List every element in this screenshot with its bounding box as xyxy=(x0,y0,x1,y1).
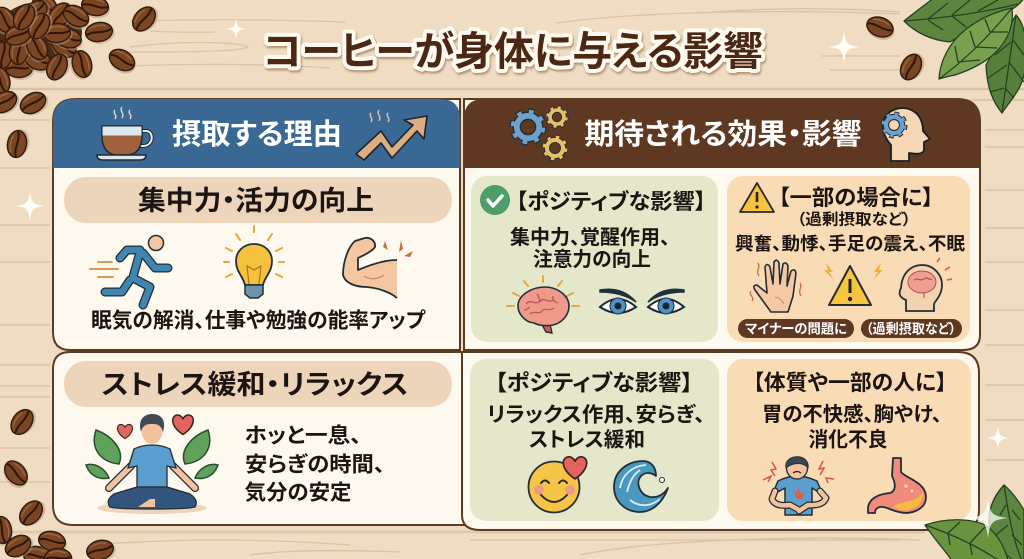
icon: warning small xyxy=(740,183,774,212)
heading pill: focus: 集中力・活力の向上 xyxy=(138,186,374,216)
icon: meditating person xyxy=(86,414,218,514)
text: positive focus xyxy=(510,226,670,271)
sparkles xyxy=(15,18,1010,450)
text: note: （過剰摂取など） xyxy=(797,210,911,228)
icon: gears xyxy=(514,108,566,158)
heading: constitution: 【体質や一部の人に】 xyxy=(753,371,947,395)
header: effects xyxy=(464,99,980,168)
text: stomach symptoms: 胃の不快感、胸やけ、 xyxy=(762,402,942,426)
icon: rising arrow xyxy=(356,110,427,160)
heading: effects: 期待される効果・影響 xyxy=(584,118,862,151)
icon: head with gear xyxy=(883,108,930,161)
heading pill: focus xyxy=(64,177,452,223)
leaves top-right xyxy=(904,0,1024,113)
text: positive focus: 集中力、覚醒作用、 xyxy=(510,226,670,249)
text: symptoms: 興奮、動悸、手足の震え、不眠 xyxy=(735,234,965,254)
icon: check mark xyxy=(480,185,510,215)
icon: brain xyxy=(507,276,579,333)
text: positive focus: 注意力の向上 xyxy=(533,248,651,271)
panel: effects top xyxy=(464,99,980,350)
icon: eyes xyxy=(600,289,684,314)
heading: caution: 【一部の場合に】 xyxy=(778,186,934,210)
leaves bottom-right xyxy=(925,485,1024,559)
body text: relax: ホッと一息、 xyxy=(244,424,362,448)
icon: head with brain xyxy=(900,258,952,311)
text: positive relax xyxy=(487,402,705,452)
coffee beans top-left xyxy=(0,0,163,159)
panel: effects bottom xyxy=(462,352,979,530)
heading pill: relax xyxy=(64,361,452,407)
tag: minor problem: マイナーの問題に xyxy=(745,322,847,336)
heading: reasons: 摂取する理由 xyxy=(172,118,342,151)
card: positive focus xyxy=(471,176,718,342)
sparkle over leaves xyxy=(968,498,1008,538)
tag: overdose: （過剰摂取など） xyxy=(866,322,956,336)
icon: runner xyxy=(90,236,168,305)
title: コーヒーが身体に与える影響 xyxy=(263,30,763,74)
icon: light bulb xyxy=(224,226,284,298)
coffee beans bottom-left xyxy=(0,404,118,559)
icon: flexed arm xyxy=(343,238,413,298)
text: stomach symptoms xyxy=(762,402,942,452)
icon: smiley with heart xyxy=(528,457,587,512)
heading pill: relax: ストレス緩和・リラックス xyxy=(102,370,408,400)
header: reasons xyxy=(53,99,460,168)
text: positive relax: ストレス緩和 xyxy=(529,428,645,452)
icon: person with stomach ache xyxy=(763,457,834,515)
body text: relax: 安らぎの時間、 xyxy=(245,452,385,476)
card: positive relax xyxy=(470,359,719,521)
heading: positive relax: 【ポジティブな影響】 xyxy=(495,370,693,396)
icon: warning large xyxy=(824,263,883,305)
body text: focus: 眠気の解消、仕事や勉強の能率アップ xyxy=(91,308,426,332)
panel: reasons top xyxy=(53,99,460,350)
body text: relax: 気分の安定 xyxy=(244,482,352,504)
icon: trembling hand xyxy=(750,260,801,312)
icon: wave xyxy=(614,461,668,512)
card: caution partial xyxy=(727,176,970,342)
heading: positive: 【ポジティブな影響】 xyxy=(516,189,706,214)
icon: stomach xyxy=(868,458,926,513)
panel: reasons bottom xyxy=(53,352,472,525)
body text: relax xyxy=(244,424,385,504)
coffee beans top-right xyxy=(863,13,929,85)
card: constitution xyxy=(727,359,971,521)
text: stomach symptoms: 消化不良 xyxy=(808,428,888,452)
icon: coffee cup xyxy=(97,107,152,160)
text: positive relax: リラックス作用、安らぎ、 xyxy=(487,402,705,426)
